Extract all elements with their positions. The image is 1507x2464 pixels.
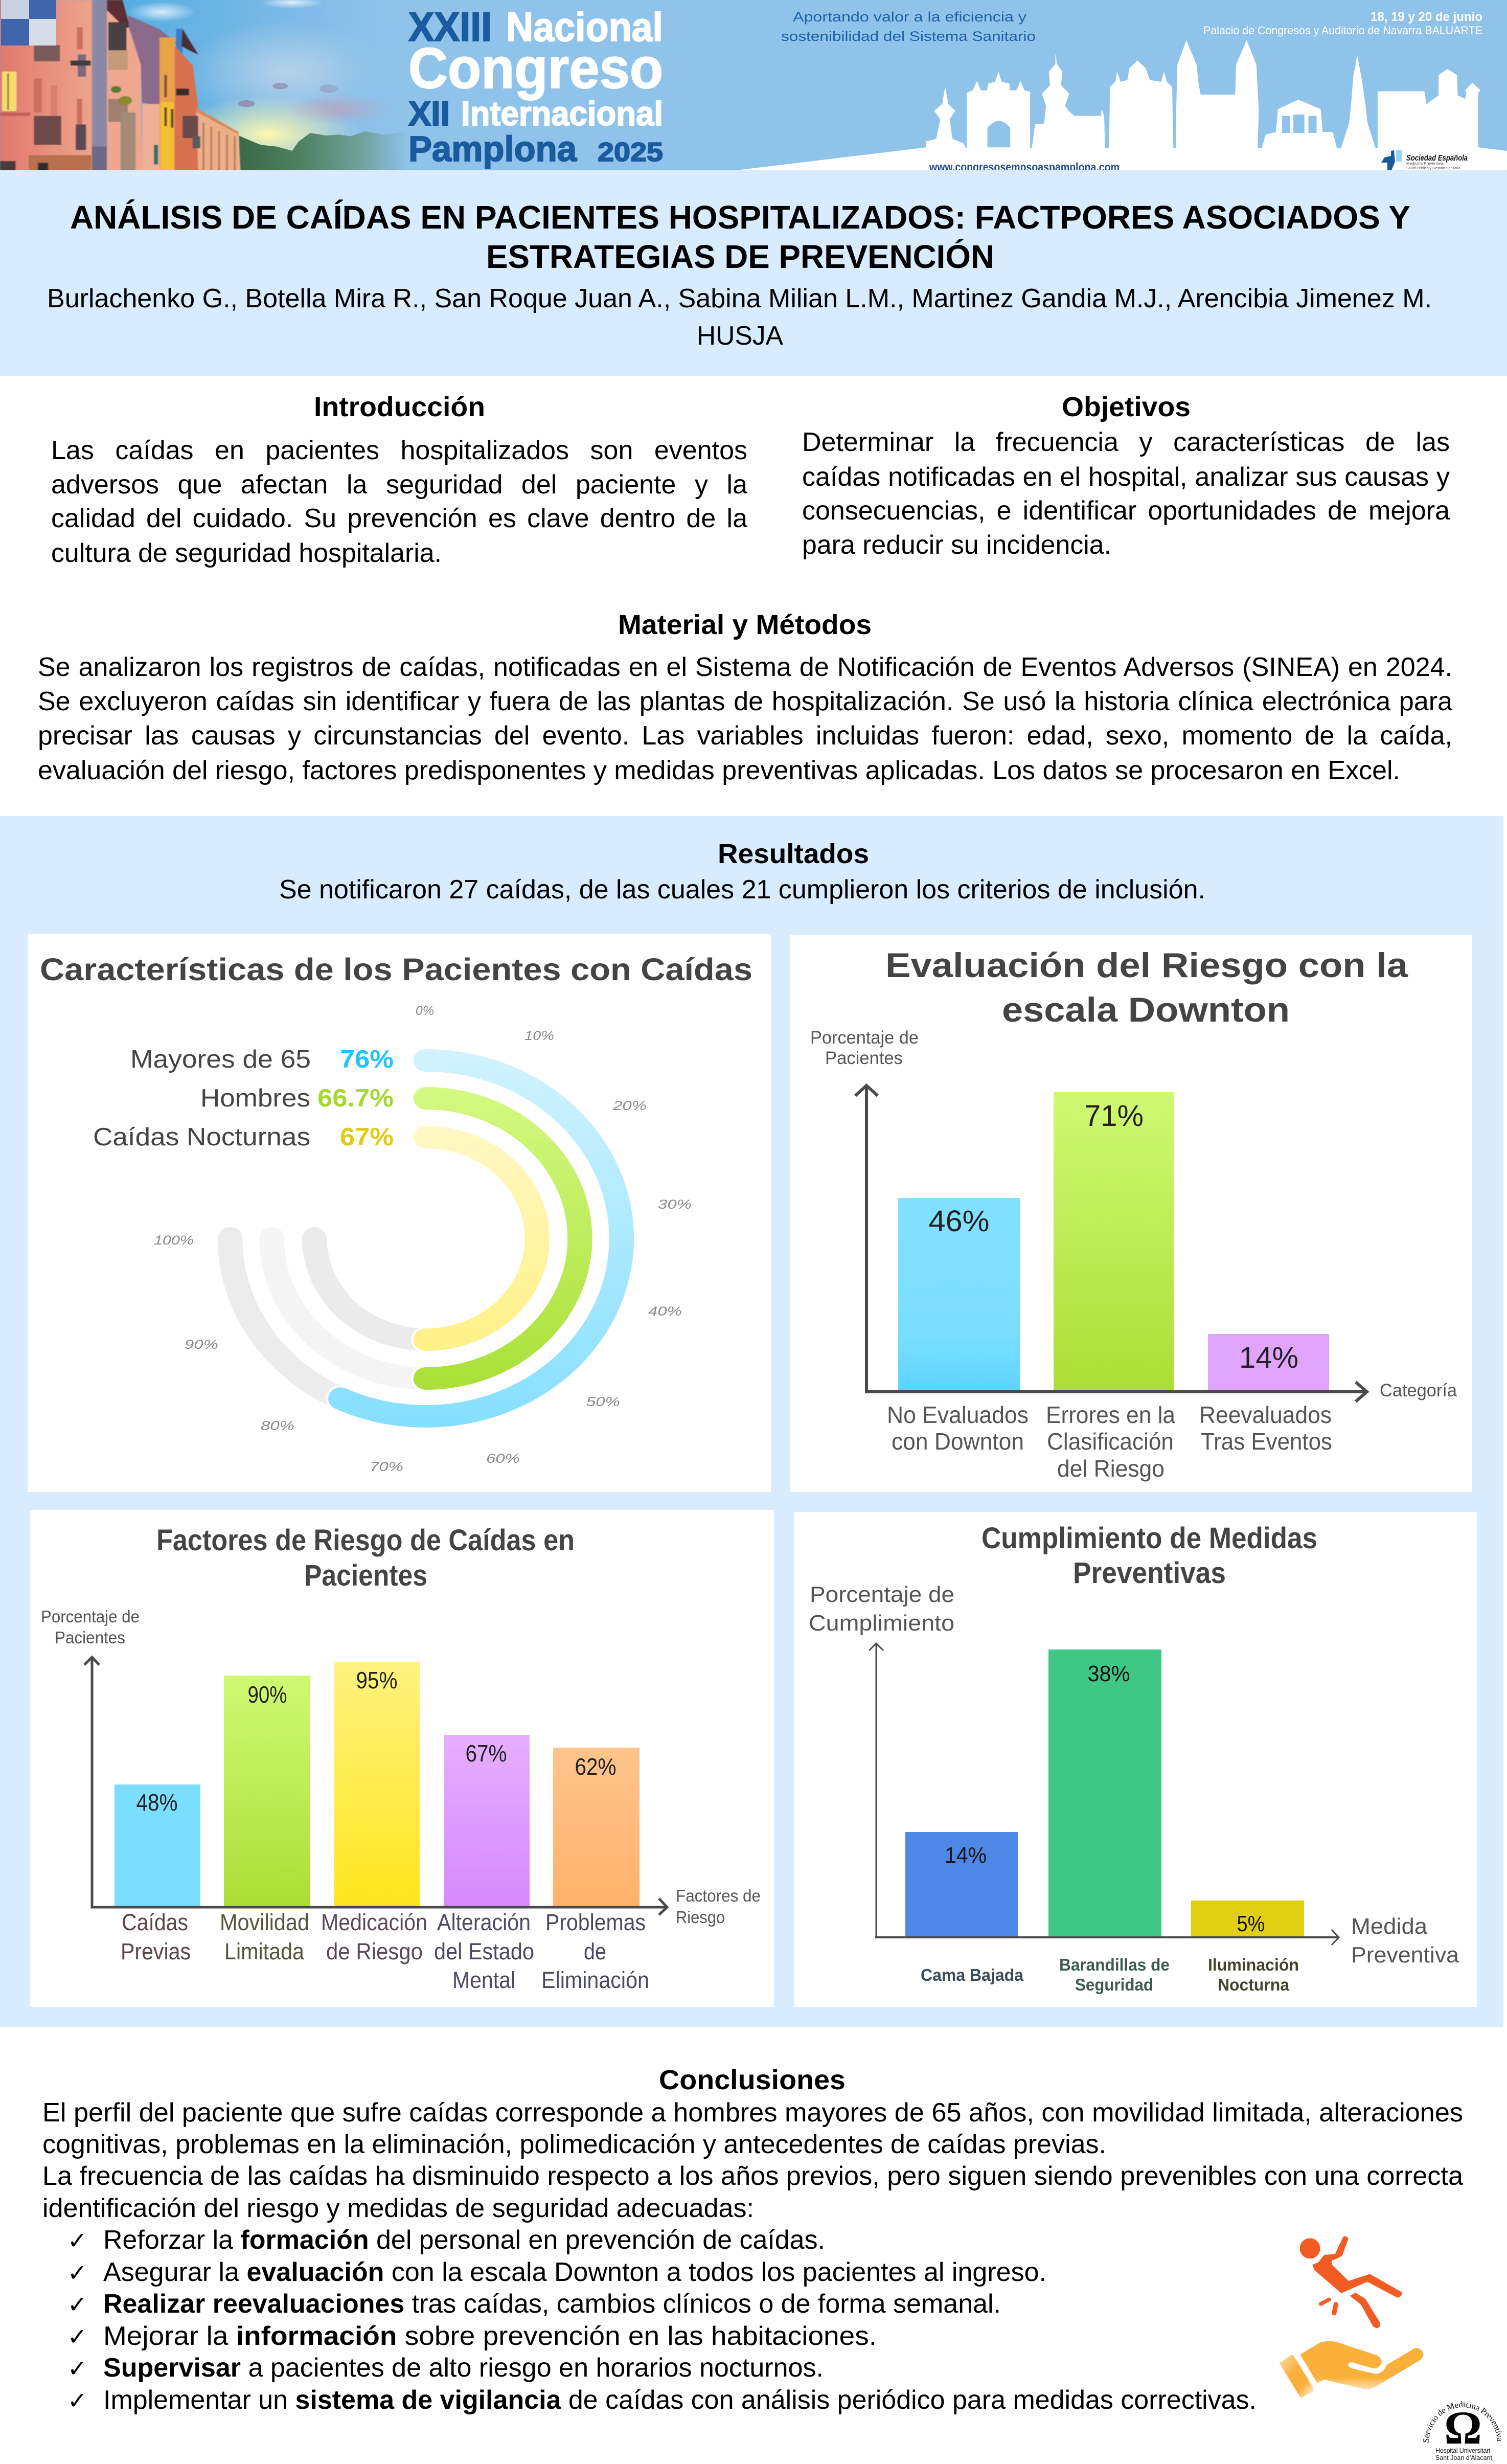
bar: reevaluados bbox=[1208, 1334, 1329, 1390]
check list: recomendaciones: Asegurar la evaluación con la escala Downton a todos los pacientes al ingreso. bbox=[103, 2257, 1046, 2287]
text block: introducción bbox=[51, 436, 747, 533]
chart title bbox=[156, 1524, 575, 1592]
heading: Conclusiones: Conclusiones bbox=[659, 2065, 846, 2095]
bar: alteración del estado mental bbox=[444, 1735, 530, 1906]
congress motto: Aportando valor a la eficiencia y bbox=[793, 9, 1027, 25]
radial tick labels: 70% bbox=[370, 1460, 403, 1474]
text block: conclusiones: cognitivas, problemas en la eliminación, polimedicación y antecedentes de caídas previas. bbox=[42, 2130, 1106, 2159]
category labels: Cama Bajada bbox=[921, 1965, 1024, 1984]
radial tick labels: 100% bbox=[154, 1233, 194, 1248]
chart title: Pacientes bbox=[304, 1559, 427, 1592]
bar: medicación de riesgo bbox=[334, 1662, 420, 1906]
category labels: Problemas bbox=[545, 1909, 646, 1935]
bar: errores en la clasificación: 71% bbox=[1084, 1099, 1144, 1133]
icon: falling person over caring hand bbox=[1279, 2236, 1424, 2398]
congress name: 2025 bbox=[598, 138, 663, 167]
text block: introducción: calidad del cuidado. Su prevención es clave dentro de la bbox=[51, 504, 747, 533]
chart title: Evaluación del Riesgo con la bbox=[885, 946, 1408, 985]
congress motto bbox=[781, 9, 1036, 44]
radial tick labels: 0% bbox=[416, 1004, 434, 1018]
text block: objetivos bbox=[802, 427, 1450, 526]
authors and affiliation bbox=[47, 284, 1432, 351]
society logo: Salud Pública y Gestión Sanitaria bbox=[1406, 167, 1460, 170]
text block: material y métodos: Se analizaron los registros de caídas, notificadas en el Sistema de Notificación de Eventos Adversos (SINEA) en 2024. bbox=[38, 652, 1452, 682]
congress name: Nacional bbox=[506, 4, 663, 50]
congress name bbox=[408, 4, 663, 169]
text: last line of objetivos: para reducir su incidencia. bbox=[802, 530, 1111, 560]
check list: recomendaciones bbox=[67, 2225, 1257, 2415]
check list: recomendaciones: Reforzar la formación del personal en prevención de caídas. bbox=[103, 2225, 825, 2255]
x axis label: Categoría bbox=[1380, 1381, 1457, 1400]
checker squares on photo bbox=[1, 0, 56, 46]
poster title: ANÁLISIS DE CAÍDAS EN PACIENTES HOSPITALIZADOS: FACTPORES ASOCIADOS Y bbox=[70, 199, 1410, 236]
authors and affiliation: HUSJA bbox=[697, 321, 783, 351]
heading: Resultados: Resultados bbox=[718, 839, 869, 869]
results summary: Se notificaron 27 caídas, de las cuales 21 cumplieron los criterios de inclusión. bbox=[279, 875, 1205, 905]
logo: Servicio de Medicina Preventiva: Hospital Universitari bbox=[1435, 2447, 1490, 2454]
bar: iluminación nocturna bbox=[1191, 1901, 1304, 1937]
text block: objetivos: Determinar la frecuencia y características de las bbox=[802, 427, 1450, 457]
radial tick labels: 40% bbox=[648, 1304, 682, 1319]
ring labels: Hombres bbox=[200, 1084, 310, 1112]
text block: objetivos: consecuencias, e identificar oportunidades de mejora bbox=[802, 496, 1450, 526]
bar: movilidad limitada bbox=[224, 1676, 310, 1906]
bar: caídas previas bbox=[115, 1784, 200, 1906]
check list: recomendaciones: Implementar un sistema de vigilancia de caídas con análisis periódico para medidas correctivas. bbox=[103, 2385, 1257, 2415]
ring labels: Mayores de 65 bbox=[130, 1046, 311, 1073]
y axis label: Pacientes bbox=[55, 1628, 125, 1647]
chart title: escala Downton bbox=[1002, 990, 1290, 1029]
category labels: Reevaluados bbox=[1199, 1401, 1332, 1428]
check list: recomendaciones: Mejorar la información sobre prevención en las habitaciones. bbox=[103, 2321, 877, 2351]
text block: conclusiones: La frecuencia de las caídas ha disminuido respecto a los años previos, pero siguen siendo prevenibles con una correcta bbox=[42, 2161, 1463, 2191]
text block: objetivos: caídas notificadas en el hospital, analizar sus causas y bbox=[802, 462, 1450, 492]
text block: introducción: adversos que afectan la seguridad del paciente y la bbox=[51, 470, 747, 500]
y axis label: Porcentaje de bbox=[810, 1028, 919, 1048]
bar: cama bajada: 14% bbox=[945, 1843, 987, 1868]
panel: evaluación del riesgo Downton (bar chart) bbox=[790, 935, 1472, 1492]
icon: falling person bbox=[1300, 2236, 1402, 2328]
radial tick labels: 30% bbox=[658, 1197, 692, 1212]
poster title bbox=[70, 199, 1410, 275]
bar: alteración del estado mental: 67% bbox=[465, 1740, 507, 1767]
category labels: Errores en la bbox=[1046, 1401, 1175, 1428]
y axis label: Cumplimiento bbox=[809, 1611, 954, 1636]
y axis label: Porcentaje de bbox=[810, 1582, 954, 1607]
radial tick labels: 60% bbox=[486, 1452, 520, 1466]
radial tick labels: 80% bbox=[261, 1419, 294, 1433]
axes with arrows bbox=[869, 1643, 1339, 1945]
radial tick labels: 50% bbox=[586, 1395, 620, 1409]
x axis label bbox=[1351, 1914, 1459, 1968]
radial tick labels: 20% bbox=[612, 1099, 647, 1113]
category labels: del Riesgo bbox=[1057, 1455, 1164, 1482]
category labels: Movilidad bbox=[220, 1909, 309, 1935]
category labels: Caídas bbox=[122, 1909, 188, 1935]
axes with arrows bbox=[84, 1657, 667, 1915]
bar: errores en la clasificación bbox=[1054, 1092, 1174, 1390]
radial bar chart tracks bbox=[230, 1060, 622, 1416]
bar: iluminación nocturna: 5% bbox=[1237, 1911, 1265, 1936]
panel: factores de riesgo (bar chart) bbox=[30, 1510, 774, 2007]
x axis label: Riesgo bbox=[676, 1908, 725, 1927]
check list: recomendaciones: Realizar reevaluaciones tras caídas, cambios clínicos o de forma semanal. bbox=[103, 2289, 1001, 2319]
y axis label bbox=[810, 1028, 919, 1068]
text: last line of material y métodos: evaluación del riesgo, factores predisponentes y medidas preventivas aplicadas. Los datos se procesaron en Excel. bbox=[38, 756, 1400, 785]
x axis label bbox=[676, 1886, 761, 1927]
congress name: Pamplona bbox=[408, 129, 577, 169]
check list: recomendaciones: ✓ bbox=[67, 2323, 87, 2350]
bar: barandillas de seguridad bbox=[1048, 1649, 1161, 1937]
poster title: ESTRATEGIAS DE PREVENCIÓN bbox=[486, 238, 994, 275]
logo: Servicio de Medicina Preventiva: Servicio de Medicina Preventiva bbox=[1423, 2401, 1501, 2443]
congress name: Congreso bbox=[408, 36, 663, 100]
category labels: Iluminación bbox=[1208, 1955, 1299, 1974]
congress date and venue bbox=[1203, 10, 1482, 37]
check list: recomendaciones: ✓ bbox=[67, 2259, 87, 2287]
skyline silhouette bbox=[735, 40, 1507, 170]
icon: caring hand bbox=[1279, 2341, 1424, 2398]
heading: Introducción: Introducción bbox=[314, 392, 485, 422]
text block: conclusiones bbox=[42, 2098, 1463, 2223]
bar: medicación de riesgo: 95% bbox=[356, 1667, 398, 1693]
bar: no evaluados: 46% bbox=[928, 1205, 990, 1238]
category labels: del Estado bbox=[434, 1938, 534, 1964]
y axis label bbox=[809, 1582, 954, 1636]
bar: no evaluados bbox=[898, 1198, 1020, 1390]
check list: recomendaciones: ✓ bbox=[67, 2227, 87, 2254]
check list: recomendaciones: ✓ bbox=[67, 2355, 87, 2382]
x axis label: Factores de bbox=[676, 1886, 761, 1905]
authors and affiliation: Burlachenko G., Botella Mira R., San Roque Juan A., Sabina Milian L.M., Martinez Gandia M.J., Arencibia Jimenez M. bbox=[47, 284, 1432, 313]
category labels: de bbox=[584, 1938, 606, 1964]
text block: conclusiones: identificación del riesgo y medidas de seguridad adecuadas: bbox=[42, 2194, 754, 2223]
text block: material y métodos: precisar las causas y circunstancias del evento. Las variables incluidas fueron: edad, sexo, momento de la caída, bbox=[38, 721, 1452, 751]
chart title: Características de los Pacientes con Caídas bbox=[40, 952, 752, 987]
title band background bbox=[0, 170, 1507, 376]
ring labels: Caídas Nocturnas bbox=[93, 1123, 310, 1151]
congress motto: sostenibilidad del Sistema Sanitario bbox=[781, 29, 1036, 44]
congress date and venue: 18, 19 y 20 de junio bbox=[1371, 10, 1482, 24]
radial tick labels: 90% bbox=[185, 1338, 218, 1352]
bar: barandillas de seguridad: 38% bbox=[1088, 1661, 1130, 1686]
chart title: Cumplimiento de Medidas bbox=[981, 1522, 1317, 1555]
ring: mayores de 65 bbox=[340, 1060, 622, 1416]
ring: caídas nocturnas bbox=[426, 1137, 537, 1340]
congress name: XXIII bbox=[408, 4, 492, 50]
chart title: Preventivas bbox=[1073, 1556, 1226, 1590]
category labels: Mental bbox=[452, 1967, 515, 1993]
bar: cama bajada bbox=[905, 1832, 1018, 1937]
ring labels: 76% bbox=[340, 1046, 394, 1073]
chart title bbox=[981, 1522, 1317, 1590]
chart title bbox=[885, 946, 1408, 1029]
y axis label: Pacientes bbox=[825, 1048, 903, 1068]
category labels: Nocturna bbox=[1218, 1975, 1290, 1994]
logo: Servicio de Medicina Preventiva bbox=[1423, 2401, 1501, 2461]
category labels: Eliminación bbox=[541, 1967, 649, 1993]
category labels: Barandillas de bbox=[1059, 1955, 1170, 1974]
y axis label: Porcentaje de bbox=[41, 1607, 140, 1626]
category labels bbox=[921, 1955, 1299, 1994]
ring labels: 66.7% bbox=[317, 1084, 394, 1112]
check list: recomendaciones: Supervisar a pacientes de alto riesgo en horarios nocturnos. bbox=[103, 2353, 824, 2383]
category labels: No Evaluados bbox=[887, 1401, 1029, 1428]
logo: Servicio de Medicina Preventiva: Sant Joan d'Alacant bbox=[1435, 2454, 1493, 2461]
chart title: Factores de Riesgo de Caídas en bbox=[156, 1524, 575, 1557]
check list: recomendaciones: ✓ bbox=[67, 2387, 87, 2414]
category labels: Seguridad bbox=[1075, 1975, 1153, 1994]
society logo: Medicina Preventiva, bbox=[1406, 162, 1444, 166]
category labels: Limitada bbox=[224, 1938, 305, 1964]
text block: introducción: Las caídas en pacientes hospitalizados son eventos bbox=[51, 436, 747, 465]
category labels: Previas bbox=[121, 1938, 191, 1964]
congress date and venue: Palacio de Congresos y Auditorio de Navarra BALUARTE bbox=[1203, 24, 1482, 37]
ring: hombres bbox=[426, 1098, 580, 1378]
bar: problemas de eliminación: 62% bbox=[575, 1753, 616, 1780]
text block: material y métodos bbox=[38, 652, 1453, 751]
category labels: Alteración bbox=[437, 1909, 531, 1935]
panel: características de los pacientes (radial bars) bbox=[28, 934, 771, 1492]
heading: Material y Métodos: Material y Métodos bbox=[618, 609, 872, 640]
category labels: Tras Eventos bbox=[1201, 1428, 1332, 1455]
category labels: con Downton bbox=[892, 1428, 1024, 1455]
y axis label bbox=[41, 1607, 140, 1647]
heading: Objetivos: Objetivos bbox=[1062, 392, 1191, 422]
panel: cumplimiento de medidas preventivas (bar chart) bbox=[794, 1512, 1477, 2007]
x axis label: Preventiva bbox=[1351, 1942, 1459, 1968]
bar: problemas de eliminación bbox=[553, 1748, 640, 1906]
banner photo: Pamplona street at sunset bbox=[0, 0, 409, 174]
radial tick labels bbox=[154, 1004, 692, 1474]
congress website: www.congresosempsoaspamplona.com bbox=[929, 161, 1120, 174]
congress name: Internacional bbox=[461, 95, 663, 133]
category labels: Clasificación bbox=[1047, 1428, 1174, 1455]
results band background bbox=[0, 816, 1503, 2027]
text block: conclusiones: El perfil del paciente que sufre caídas corresponde a hombres mayores de 65 años, con movilidad limitada, alteraciones bbox=[42, 2098, 1463, 2128]
conference banner bbox=[0, 0, 1507, 174]
society logo: Sociedad Española bbox=[1406, 154, 1468, 163]
congress name: XII bbox=[408, 95, 450, 133]
bar: reevaluados: 14% bbox=[1239, 1341, 1298, 1374]
bar: movilidad limitada: 90% bbox=[247, 1681, 287, 1708]
ring labels: 67% bbox=[340, 1123, 394, 1151]
text: last line of introducción: cultura de seguridad hospitalaria. bbox=[51, 538, 442, 568]
category labels bbox=[121, 1909, 649, 1993]
ring labels bbox=[93, 1046, 394, 1151]
category labels: Medicación bbox=[321, 1909, 427, 1935]
text block: material y métodos: Se excluyeron caídas sin identificar y fuera de las plantas de hospitalización. Se usó la historia clínica electrónica para bbox=[38, 687, 1452, 716]
logo: Servicio de Medicina Preventiva: Ω bbox=[1444, 2402, 1482, 2454]
radial tick labels: 10% bbox=[524, 1029, 554, 1043]
society logo bbox=[1381, 150, 1468, 170]
x axis label: Medida bbox=[1351, 1914, 1428, 1939]
category labels bbox=[887, 1401, 1332, 1482]
axes with arrows bbox=[855, 1086, 1367, 1401]
check list: recomendaciones: ✓ bbox=[67, 2291, 87, 2318]
bar: caídas previas: 48% bbox=[136, 1789, 178, 1816]
category labels: de Riesgo bbox=[326, 1938, 423, 1964]
